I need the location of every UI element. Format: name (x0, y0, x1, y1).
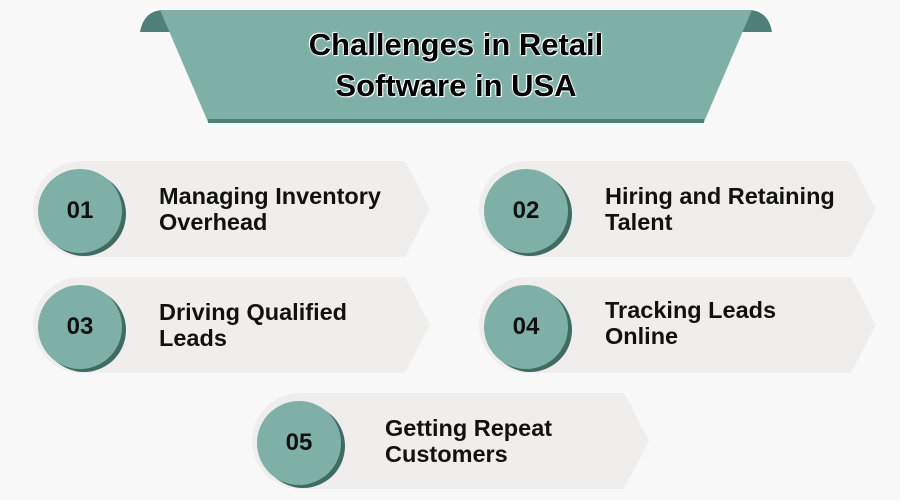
card 05: Customers (385, 441, 508, 467)
card 03: Driving Qualified (159, 299, 347, 325)
card 03: 03 (67, 313, 93, 340)
card 05: Getting Repeat (385, 415, 552, 441)
card 05 (252, 393, 649, 489)
title banner (140, 10, 772, 123)
card 01: 01 (67, 197, 93, 224)
title banner: Software in USA (335, 68, 577, 103)
card 04: Tracking Leads (605, 297, 776, 323)
card 02: Hiring and Retaining (605, 183, 835, 209)
card 01: Overhead (159, 209, 267, 235)
card 02: Talent (605, 209, 672, 235)
card 05: 05 (286, 429, 312, 456)
card 03: Leads (159, 325, 227, 351)
card 02 (479, 161, 876, 257)
card 02: 02 (513, 197, 539, 224)
card 04 (479, 277, 876, 373)
card 03 (33, 277, 430, 373)
card 04: Online (605, 323, 678, 349)
title banner: Challenges in Retail (309, 27, 603, 62)
card 01: Managing Inventory (159, 183, 381, 209)
card 01 (33, 161, 430, 257)
card 04: 04 (513, 313, 539, 340)
